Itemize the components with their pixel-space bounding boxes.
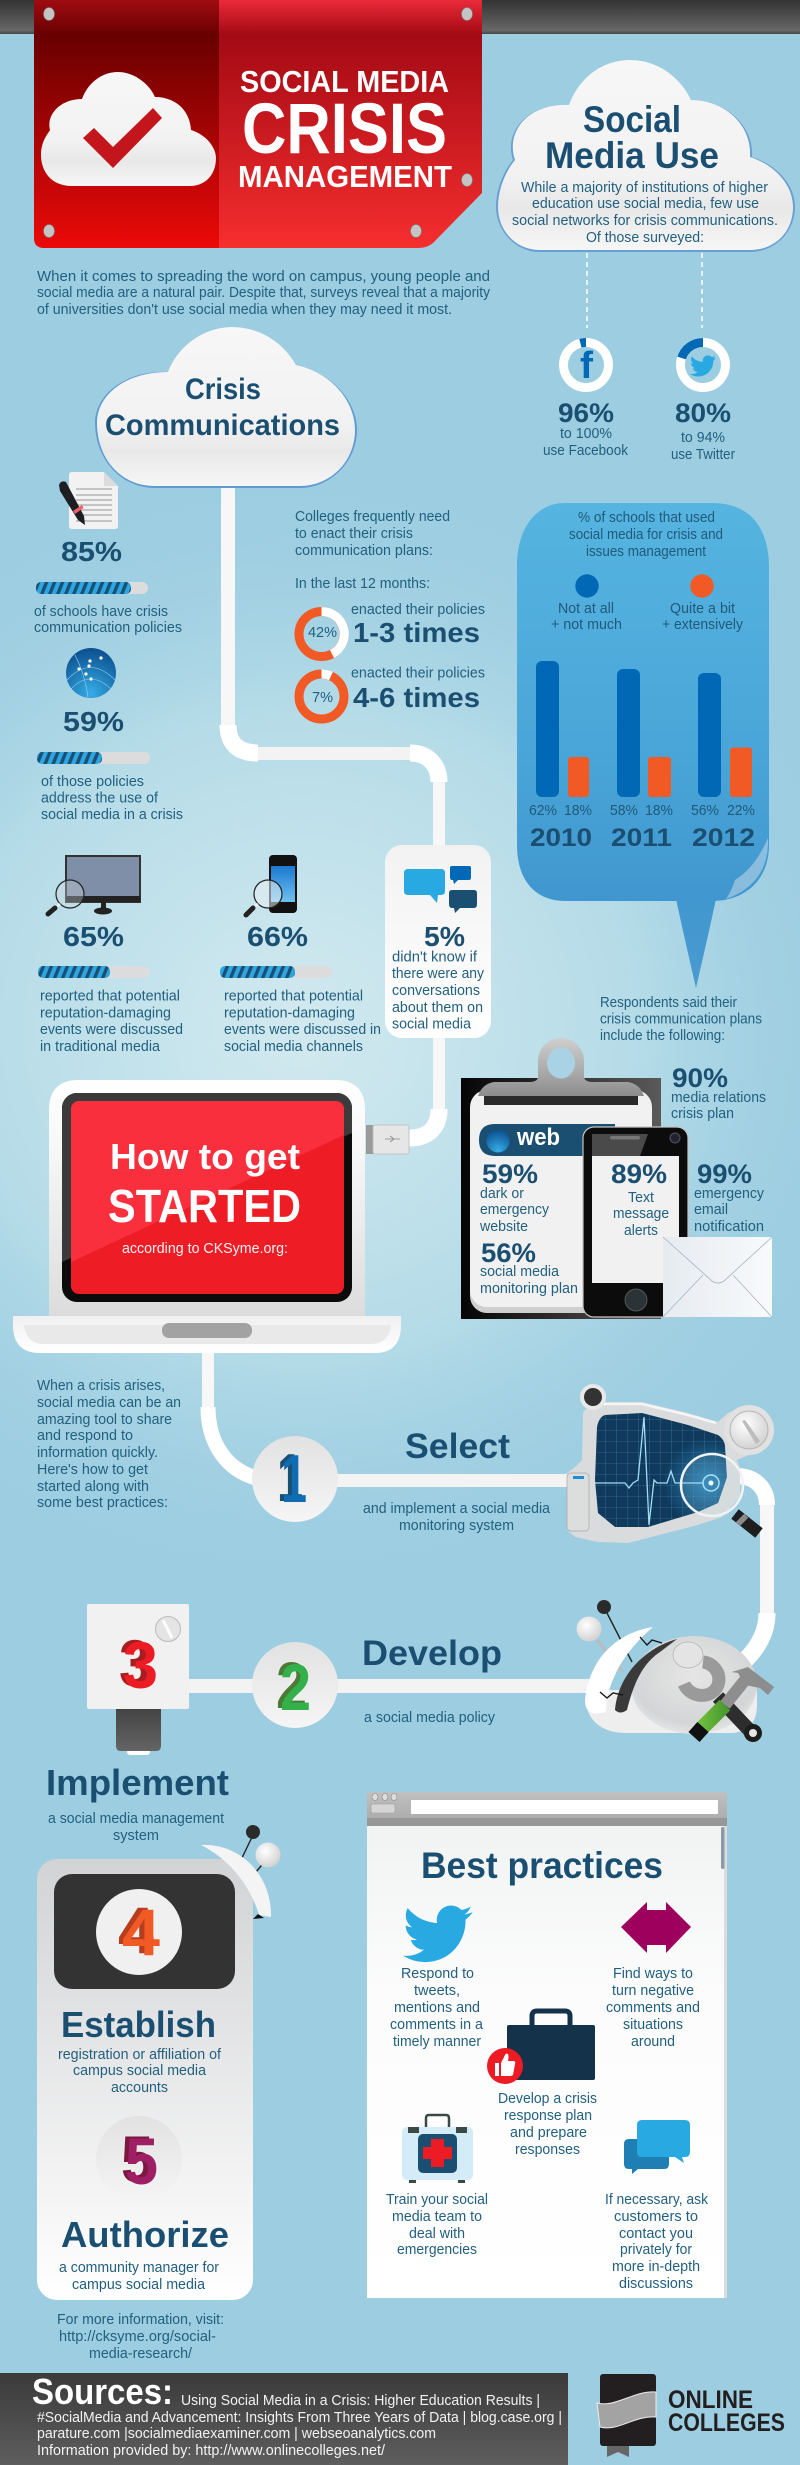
stat: Facebook: to 100% xyxy=(560,426,612,442)
step 2 text: Develop xyxy=(362,1634,502,1673)
stat: 85 percent: communication policies xyxy=(34,620,182,636)
text: respondents: Respondents said their xyxy=(600,995,737,1011)
heading: Crisis xyxy=(185,373,261,406)
text block: Of those surveyed: xyxy=(586,230,704,246)
icon: first aid kit xyxy=(402,2115,473,2183)
step 4 text: accounts xyxy=(111,2080,168,2096)
step 4 text: Establish xyxy=(61,2004,216,2045)
text: when a crisis arises: some best practices: xyxy=(37,1495,168,1511)
stat: Twitter: 80% xyxy=(675,398,731,428)
step 5 text: a community manager for xyxy=(59,2260,219,2276)
step 2 text xyxy=(362,1634,502,1726)
knob xyxy=(724,1405,774,1455)
step 1 badge: 1 xyxy=(281,1441,307,1517)
text block: social networks for crisis communications. xyxy=(512,213,778,229)
stat: 66 percent: 66% xyxy=(247,921,308,952)
bar chart: 18% xyxy=(645,803,673,819)
tip: respond: tweets, xyxy=(414,1983,460,1999)
tip: train team: emergencies xyxy=(397,2242,477,2258)
icon: twitter bird xyxy=(403,1906,473,1962)
icon: briefcase with thumbs up xyxy=(487,2011,595,2084)
text block: about them on xyxy=(392,1000,483,1016)
stat: 4-6 times: 4-6 times xyxy=(353,682,480,713)
stat: 59 percent xyxy=(37,706,183,823)
stat: 90 percent: crisis plan xyxy=(671,1106,734,1122)
eye xyxy=(580,1384,606,1410)
stat: 59 percent dark site: emergency xyxy=(480,1202,550,1218)
step 5 badge: 5 xyxy=(121,2122,153,2196)
laptop base xyxy=(13,1316,401,1353)
step 1 badge: 1 xyxy=(277,1440,303,1516)
tip: crisis plan: response plan xyxy=(504,2108,592,2124)
text block: education use social media, few use xyxy=(532,196,759,212)
stat: 56 percent monitoring: 56% xyxy=(481,1238,536,1268)
tip: crisis plan xyxy=(498,2091,597,2158)
wrench xyxy=(684,1662,762,1742)
heading xyxy=(545,99,719,176)
stat: 59 percent: of those policies xyxy=(41,774,144,790)
panel: bar chart speech bubble xyxy=(517,503,769,988)
step 4 text xyxy=(58,2004,222,2096)
tip: contact privately: discussions xyxy=(619,2276,693,2292)
chart: 7 percent donut: 7% xyxy=(312,690,333,706)
step 4 screen: 4 xyxy=(118,1893,154,1967)
text block: conversations xyxy=(392,983,480,999)
legend: + not much xyxy=(551,617,622,633)
bar chart: 18% xyxy=(564,803,592,819)
step 3 device: 3 xyxy=(119,1626,151,1700)
step 5 text: Authorize xyxy=(61,2214,229,2255)
stat: Twitter: to 94% xyxy=(681,430,725,446)
icon: robot with tools xyxy=(576,1600,774,1742)
tip: contact privately xyxy=(605,2192,709,2292)
intro text: social media are a natural pair. Despite that, surveys reveal that a majority xyxy=(37,285,491,301)
stat: 99 percent: email xyxy=(694,1202,728,1218)
tip: crisis plan: responses xyxy=(515,2142,580,2158)
tip: find ways: turn negative xyxy=(612,1983,694,1999)
text: when a crisis arises: amazing tool to share xyxy=(37,1412,172,1428)
magnifier xyxy=(681,1454,759,1533)
icon: envelope xyxy=(663,1237,772,1317)
stat: 1-3 times: enacted their policies xyxy=(351,602,485,618)
step 3 text: system xyxy=(113,1828,159,1844)
panel: colleges text: to enact their crisis xyxy=(295,526,413,542)
chart: 7 percent donut xyxy=(299,674,344,719)
heading: Communications xyxy=(105,409,340,442)
stat: 4-6 times: enacted their policies xyxy=(351,666,485,682)
step 2 badge: 2 xyxy=(280,1650,311,1724)
step 1 badge xyxy=(252,1436,338,1522)
panel: colleges text: In the last 12 months: xyxy=(295,576,430,592)
chart heading: % of schools that used xyxy=(578,510,715,526)
panel: title banner xyxy=(34,0,482,248)
tip: find ways: around xyxy=(631,2034,675,2050)
icon: chat bubbles xyxy=(624,2120,690,2174)
stat: Facebook: use Facebook xyxy=(543,443,629,459)
text block: social media xyxy=(392,1017,472,1033)
connector pipes xyxy=(185,484,774,1693)
title: SOCIAL MEDIA xyxy=(240,64,449,99)
heading: Media Use xyxy=(545,135,719,176)
stat: 99 percent: notification xyxy=(694,1219,764,1235)
stat: 66 percent: social media channels xyxy=(224,1039,363,1055)
tip: contact privately: contact you xyxy=(619,2226,693,2242)
tip: respond: Respond to xyxy=(401,1966,474,1982)
bar chart: 62% xyxy=(529,803,557,819)
tip: contact privately: more in-depth xyxy=(612,2259,700,2275)
tip: crisis plan: and prepare xyxy=(510,2125,587,2141)
step 3 device xyxy=(87,1604,189,1755)
bar chart: 2010 xyxy=(530,824,592,852)
tip: contact privately: privately for xyxy=(620,2242,692,2258)
stat: 90 percent: 90% xyxy=(672,1063,728,1093)
bar chart xyxy=(529,661,755,852)
chart: 42 percent donut: 42% xyxy=(308,625,337,641)
text block: While a majority of institutions of higher xyxy=(521,180,768,196)
text: more information: media-research/ xyxy=(89,2346,193,2362)
stat: 59 percent dark site: dark or xyxy=(480,1186,524,1202)
stat: Facebook: 96% xyxy=(558,398,614,428)
bar chart: 22% xyxy=(727,803,755,819)
step 5 text xyxy=(59,2214,229,2293)
step 1 text: and implement a social media xyxy=(363,1501,551,1517)
stat: 89 percent: alerts xyxy=(624,1223,658,1239)
icon: USB plug xyxy=(366,1125,409,1154)
tip: respond: timely manner xyxy=(393,2034,481,2050)
stat: 65 percent: events were discussed xyxy=(40,1022,183,1038)
stat: 85 percent: of schools have crisis xyxy=(34,604,168,620)
heading: how to get started: according to CKSyme.org: xyxy=(122,1241,288,1257)
progress bar xyxy=(37,752,150,764)
stat: 59 percent: 59% xyxy=(63,706,124,737)
stat: 90 percent xyxy=(671,1063,766,1122)
icon: magenta arrows xyxy=(621,1902,691,1953)
antenna xyxy=(576,1600,632,1672)
step 4 text: campus social media xyxy=(73,2063,207,2079)
chart heading: social media for crisis and xyxy=(569,527,723,543)
stat: 59 percent dark site: 59% xyxy=(482,1159,538,1189)
stat: 89 percent xyxy=(611,1159,669,1239)
stat: 59 percent: address the use of xyxy=(41,790,159,806)
step 5 badge: 5 xyxy=(125,2124,158,2198)
panel: sources bar: Information provided by: http://www.onlinecolleges.net/ xyxy=(37,2443,386,2459)
panel: best practices browser window xyxy=(367,1792,727,2298)
heading: how to get started: STARTED xyxy=(108,1180,301,1232)
icon: globe xyxy=(66,648,116,698)
progress bar xyxy=(220,966,332,978)
stat: 65 percent: reputation-damaging xyxy=(40,1006,171,1022)
step 3 device: 3 xyxy=(123,1628,158,1702)
intro text: of universities don't use social media when they may need it most. xyxy=(37,302,452,318)
step 5 badge xyxy=(96,2116,182,2202)
bar chart: 56% xyxy=(691,803,719,819)
progress bar xyxy=(38,966,150,978)
progress bar xyxy=(36,582,148,594)
bar chart: 2012 xyxy=(692,824,755,852)
chart: Twitter donut xyxy=(680,342,726,388)
icon: chat bubbles xyxy=(404,866,477,913)
legend: Not at all xyxy=(558,601,614,617)
text: more information: For more information, visit: xyxy=(57,2312,224,2328)
text: when a crisis arises: When a crisis arises, xyxy=(37,1378,165,1394)
chart: 42 percent donut xyxy=(299,611,344,656)
step 3 text xyxy=(46,1762,229,1844)
stat: 66 percent: reputation-damaging xyxy=(224,1006,355,1022)
text: more information xyxy=(57,2312,224,2362)
tip: respond xyxy=(390,1966,484,2050)
step 2 badge xyxy=(252,1642,338,1728)
heading xyxy=(105,373,340,442)
legend: Quite a bit xyxy=(670,601,735,617)
title xyxy=(238,64,452,194)
text block: didn't know if xyxy=(392,949,478,965)
step 2 text: a social media policy xyxy=(364,1710,496,1726)
heading: Best practices xyxy=(421,1845,663,1886)
panel: sources bar: Sources: xyxy=(32,2371,173,2412)
icon: rivets xyxy=(44,8,472,238)
stat: 89 percent: 89% xyxy=(611,1159,667,1189)
stat: 65 percent: in traditional media xyxy=(40,1039,161,1055)
stat: 4-6 times xyxy=(351,666,485,713)
tip: crisis plan: Develop a crisis xyxy=(498,2091,597,2107)
text: respondents: include the following: xyxy=(600,1028,725,1044)
icon: twitter bird xyxy=(690,355,716,376)
stat: 66 percent: reported that potential xyxy=(224,989,363,1005)
stat: 59 percent dark site xyxy=(479,1159,550,1235)
step 1 text: monitoring system xyxy=(399,1518,514,1534)
web pill xyxy=(479,1124,615,1156)
bar chart: 2011 xyxy=(611,824,672,852)
panel: clipboard xyxy=(461,1038,661,1319)
panel: 5 percent box xyxy=(385,845,491,1038)
web pill: web xyxy=(516,1124,560,1151)
chart heading: issues management xyxy=(586,544,706,560)
tip: find ways: Find ways to xyxy=(613,1966,693,1982)
panel: laptop xyxy=(13,1080,401,1353)
heading: how to get started: How to get xyxy=(110,1136,300,1177)
panel: steps 4 and 5 xyxy=(37,1825,280,2300)
top bar xyxy=(0,0,800,34)
text block xyxy=(512,180,778,246)
stat: 59 percent: social media in a crisis xyxy=(41,807,183,823)
step 1 text: Select xyxy=(405,1427,510,1466)
logo: online colleges: ONLINE xyxy=(668,2386,753,2414)
panel: colleges text: communication plans: xyxy=(295,543,433,559)
step 4 screen: 4 xyxy=(122,1895,160,1969)
panel: social media use cloud xyxy=(496,60,795,252)
heading: how to get started xyxy=(108,1136,301,1257)
stat: 65 percent xyxy=(38,921,183,1055)
tip: train team: deal with xyxy=(409,2226,465,2242)
stat: 66 percent: events were discussed in xyxy=(224,1022,381,1038)
panel: colleges text: Colleges frequently need xyxy=(295,509,450,525)
step 3 text: Implement xyxy=(46,1762,229,1803)
step 1 text xyxy=(363,1427,551,1534)
intro text xyxy=(37,269,491,318)
tip: find ways: comments and xyxy=(606,2000,700,2016)
stat: 99 percent: emergency xyxy=(694,1186,765,1202)
tip: train team xyxy=(386,2192,488,2258)
stat: 56 percent monitoring xyxy=(480,1238,578,1297)
stat: 56 percent monitoring: monitoring plan xyxy=(480,1281,578,1297)
text: when a crisis arises xyxy=(37,1378,181,1511)
tip: respond: comments in a xyxy=(390,2017,484,2033)
icon: facebook f: f xyxy=(580,345,593,387)
tip: train team: Train your social xyxy=(386,2192,488,2208)
stat: Twitter: use Twitter xyxy=(671,447,735,463)
hammer xyxy=(694,1667,774,1737)
stat: 59 percent dark site: website xyxy=(479,1219,528,1235)
icon: smartphone xyxy=(583,1127,688,1317)
icon: satellite dish xyxy=(201,1825,280,1919)
stat: 99 percent xyxy=(694,1159,765,1235)
logo: online colleges xyxy=(597,2374,785,2457)
panel: 5 percent box: 5% xyxy=(424,921,465,952)
tip: contact privately: If necessary, ask xyxy=(605,2192,709,2208)
text: respondents xyxy=(600,995,762,1044)
tip: train team: media team to xyxy=(392,2209,482,2225)
icon: clipboard clip xyxy=(478,1038,644,1105)
step 5 text: campus social media xyxy=(72,2277,206,2293)
title: MANAGEMENT xyxy=(238,159,452,194)
text: respondents: crisis communication plans xyxy=(600,1012,762,1028)
stat: Facebook xyxy=(543,398,629,459)
icon: document and pen xyxy=(59,472,118,529)
stat: 1-3 times xyxy=(351,602,485,648)
legend xyxy=(551,574,744,633)
tip: find ways: situations xyxy=(623,2017,683,2033)
dashed connectors xyxy=(587,253,702,328)
icon: phone with magnifier xyxy=(246,855,297,915)
icon: monitor with magnifier xyxy=(48,856,140,914)
stat: 1-3 times: 1-3 times xyxy=(353,617,480,648)
stat: 90 percent: media relations xyxy=(671,1090,766,1106)
panel: sources bar xyxy=(0,2371,568,2465)
stat: Twitter xyxy=(671,398,735,463)
tip: respond: mentions and xyxy=(394,2000,480,2016)
panel: crisis communications cloud xyxy=(95,327,357,488)
scrollbar xyxy=(721,1826,727,2298)
text: when a crisis arises: and respond to xyxy=(37,1428,133,1444)
step 4 text: registration or affiliation of xyxy=(58,2047,222,2063)
stat: 85 percent: 85% xyxy=(61,536,122,567)
step 2 badge: 2 xyxy=(276,1648,307,1722)
step 4 screen xyxy=(54,1874,235,1989)
panel: colleges text xyxy=(295,509,450,592)
stat: 89 percent: Text xyxy=(628,1190,654,1206)
stat: 65 percent: 65% xyxy=(63,921,124,952)
text: when a crisis arises: information quickly. xyxy=(37,1445,158,1461)
panel: sources bar: Using Social Media in a Crisis: Higher Education Results | xyxy=(181,2393,540,2409)
stat: 89 percent: message xyxy=(613,1206,669,1222)
text: when a crisis arises: social media can be an xyxy=(37,1395,181,1411)
tip: contact privately: customers to xyxy=(614,2209,698,2225)
text block: there were any xyxy=(392,966,485,982)
heading: Social xyxy=(583,99,681,140)
browser chrome xyxy=(367,1792,727,1826)
text block xyxy=(392,949,485,1033)
stat: 56 percent monitoring: social media xyxy=(480,1264,560,1280)
stat: 99 percent: 99% xyxy=(697,1159,752,1189)
tip: find ways xyxy=(606,1966,700,2050)
panel: sources bar: #SocialMedia and Advancement: Insights From Three Years of Data | blog.case.org | xyxy=(37,2410,562,2426)
title: CRISIS xyxy=(242,90,447,169)
chart heading xyxy=(569,510,723,560)
step 3 text: a social media management xyxy=(48,1811,224,1827)
stat: 66 percent xyxy=(220,921,381,1055)
text: when a crisis arises: Here's how to get xyxy=(37,1462,148,1478)
bar chart: 58% xyxy=(610,803,638,819)
icon: heart monitor device xyxy=(567,1384,774,1543)
text: more information: http://cksyme.org/social- xyxy=(59,2329,216,2345)
panel: sources bar: parature.com |socialmediaexaminer.com | webseoanalytics.com xyxy=(37,2426,436,2442)
intro text: When it comes to spreading the word on campus, young people and xyxy=(37,269,490,285)
stat: 65 percent: reported that potential xyxy=(40,989,180,1005)
icon: cloud with check mark xyxy=(41,72,216,186)
legend: + extensively xyxy=(662,617,744,633)
text: when a crisis arises: started along with xyxy=(37,1479,149,1495)
chart: Facebook donut xyxy=(564,342,608,388)
stat: 85 percent xyxy=(34,536,182,636)
